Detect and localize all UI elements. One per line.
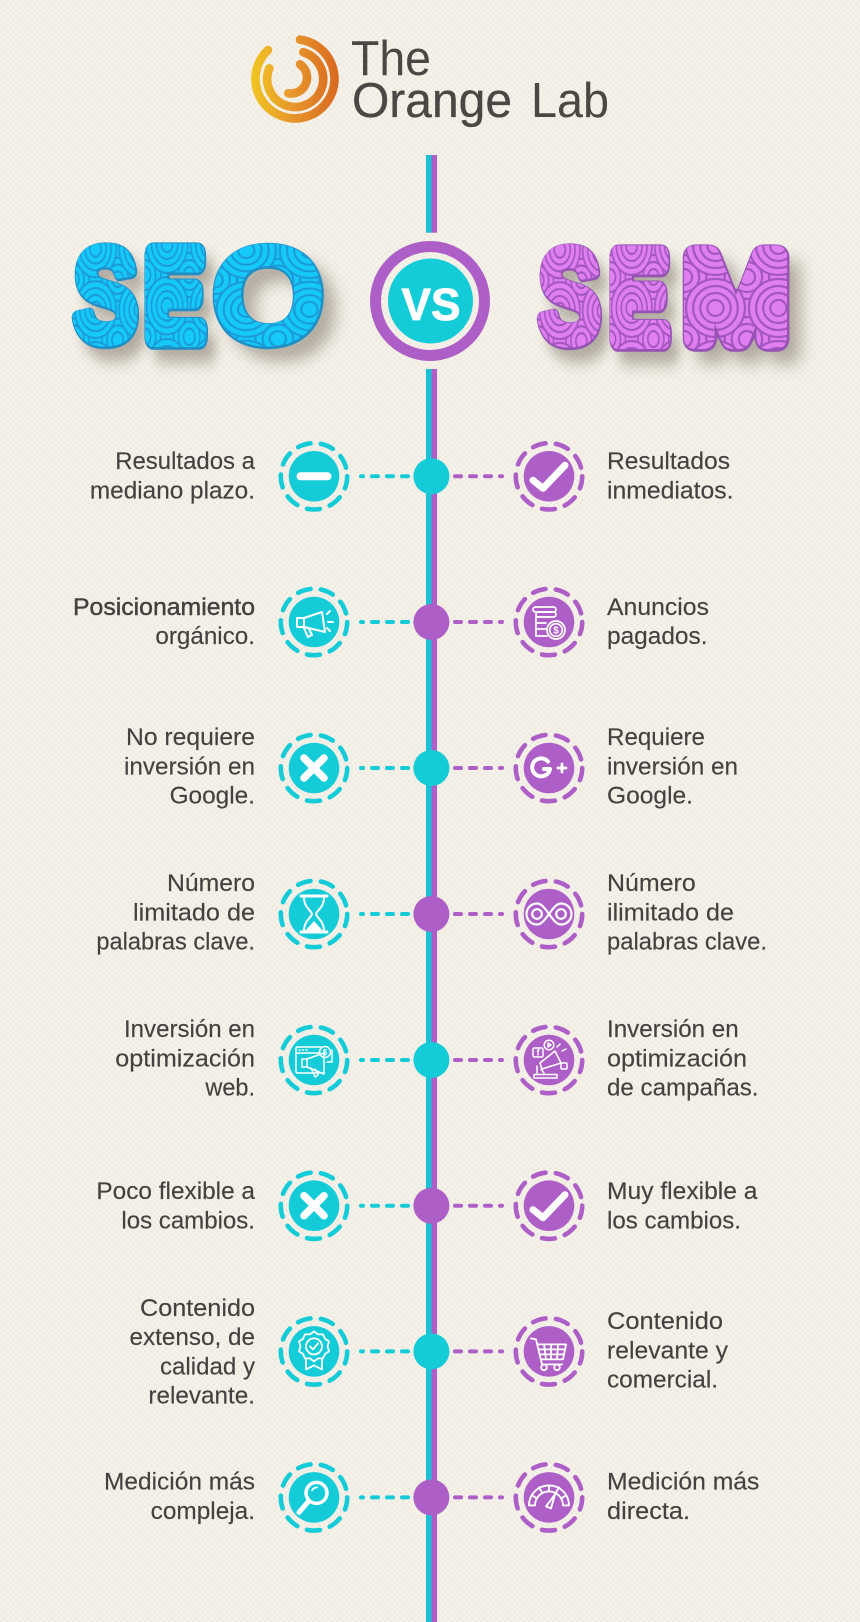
SEM text: Requiere: [607, 724, 705, 751]
connectors and node: [361, 1479, 503, 1515]
SEO text: palabras clave.: [96, 928, 255, 955]
SEO icon: magnifier: [281, 1464, 347, 1531]
SEO icon: browser with megaphone: [281, 1027, 347, 1093]
SEM icon: shopping cart: [516, 1318, 582, 1385]
SEM text: palabras clave.: [607, 928, 767, 955]
SEM text: [607, 1308, 728, 1394]
SEM text: Inversión en: [607, 1016, 739, 1043]
SEO icon: browser with megaphone: $: [323, 1048, 328, 1057]
SEM icon: coins: $: [553, 626, 559, 636]
row 2: posicionamiento: [73, 589, 709, 655]
row 8: medicion: [104, 1464, 759, 1531]
SEM text: inmediatos.: [607, 477, 734, 504]
SEM text: Contenido: [607, 1308, 723, 1335]
SEO text: Inversión en: [124, 1016, 255, 1043]
connectors and node: [361, 458, 503, 494]
SEO icon: hourglass: [281, 881, 347, 947]
logo mark: orange spiral arcs: [255, 40, 334, 118]
row 6: flexibilidad: [96, 1172, 758, 1239]
row 5: inversion en optimizacion: [115, 1016, 759, 1101]
SEM text: de campañas.: [607, 1074, 758, 1101]
logo wordmark: The: [351, 32, 431, 86]
heading: SEM: M: [684, 230, 787, 366]
SEM text: optimización: [607, 1045, 747, 1072]
SEO text: limitado de: [133, 899, 255, 926]
SEM text: pagados.: [607, 623, 708, 650]
heading: SEO: [73, 222, 321, 369]
logo wordmark: Lab: [531, 74, 609, 128]
SEO text: Contenido: [140, 1295, 255, 1322]
SEO text: [104, 1468, 255, 1525]
SEO text: Google.: [170, 782, 255, 809]
SEM text: ilimitado de: [607, 899, 734, 926]
SEO text: mediano plazo.: [90, 477, 255, 504]
SEO icon: quality badge: [281, 1318, 347, 1385]
SEO text: inversión en: [124, 753, 255, 780]
SEO text: Medición más: [104, 1468, 255, 1496]
SEM text: [607, 594, 709, 650]
SEO text: [73, 594, 255, 650]
SEM text: Anuncios: [607, 594, 709, 621]
SEM text: [607, 870, 767, 955]
heading: SEM: [538, 223, 787, 370]
heading: SEO: S: [73, 222, 137, 369]
row 7: contenido: [130, 1295, 728, 1409]
SEM icon: check: [516, 1172, 582, 1239]
heading: SEM: E: [610, 230, 667, 366]
SEM text: comercial.: [607, 1366, 718, 1394]
SEM text: los cambios.: [607, 1207, 741, 1234]
SEM text: Muy flexible a: [607, 1178, 758, 1205]
connectors and node: [361, 1333, 503, 1369]
SEM text: directa.: [607, 1498, 690, 1525]
row 3: inversion en Google: [124, 724, 738, 809]
SEO icon: minus: [281, 443, 347, 510]
SEO text: Número: [167, 870, 255, 897]
SEM icon: check: [516, 443, 582, 510]
SEM text: [607, 1178, 758, 1234]
SEM icon: campaign megaphone: [516, 1027, 582, 1093]
row 1: plazo de resultados: [90, 443, 733, 509]
central timeline: [426, 155, 437, 1622]
SEO text: [115, 1016, 255, 1101]
SEO text: web.: [204, 1074, 255, 1101]
connectors and node: [361, 604, 503, 640]
SEO text: [90, 448, 256, 504]
SEM text: [607, 448, 734, 504]
SEM text: relevante y: [607, 1337, 728, 1364]
SEM text: Medición más: [607, 1468, 759, 1496]
SEO icon: megaphone: [281, 589, 347, 655]
SEO text: No requiere: [126, 724, 255, 751]
SEO text: los cambios.: [121, 1207, 255, 1234]
SEO text: [124, 724, 255, 809]
SEM text: [607, 724, 738, 809]
SEO text: compleja.: [151, 1498, 255, 1525]
connectors and node: [361, 1188, 503, 1224]
SEO text: extenso, de: [130, 1324, 255, 1351]
heading: SEM: S: [538, 223, 600, 370]
logo wordmark: [351, 32, 609, 128]
VS badge: [376, 246, 484, 356]
SEO text: calidad y: [160, 1353, 255, 1380]
SEM icon: gauge: [516, 1464, 582, 1531]
SEO icon: cross: [281, 1172, 347, 1239]
SEO text: orgánico.: [155, 623, 255, 650]
SEO text: [96, 1178, 256, 1234]
heading: SEO: O: [215, 223, 321, 366]
SEM icon: campaign megaphone: f: [536, 1048, 540, 1058]
connectors and node: [361, 896, 503, 932]
SEM icon: Google plus: [516, 735, 582, 801]
SEM text: [607, 1468, 759, 1525]
VS badge: VS: [402, 279, 460, 330]
logo wordmark: Orange: [352, 74, 512, 128]
SEO text: Poco flexible a: [96, 1178, 256, 1205]
connectors and node: [361, 1042, 503, 1078]
SEM text: Google.: [607, 782, 693, 809]
SEM icon: infinity: [516, 881, 582, 947]
SEO text: Posicionamiento: [73, 594, 255, 621]
row 4: palabras clave: [96, 870, 767, 955]
SEO text: optimización: [115, 1045, 255, 1072]
heading: SEO: E: [145, 228, 203, 363]
SEM text: [607, 1016, 758, 1101]
SEO text: [96, 870, 255, 955]
SEO text: relevante.: [148, 1382, 255, 1409]
SEM text: Número: [607, 870, 696, 897]
SEO text: [130, 1295, 255, 1409]
SEO icon: cross: [281, 735, 347, 801]
SEM text: Resultados: [607, 448, 730, 475]
logo: The Orange Lab: [255, 32, 609, 128]
SEM icon: coins: [516, 589, 582, 655]
connectors and node: [361, 750, 503, 786]
SEO text: Resultados a: [115, 448, 256, 475]
SEM text: inversión en: [607, 753, 738, 780]
